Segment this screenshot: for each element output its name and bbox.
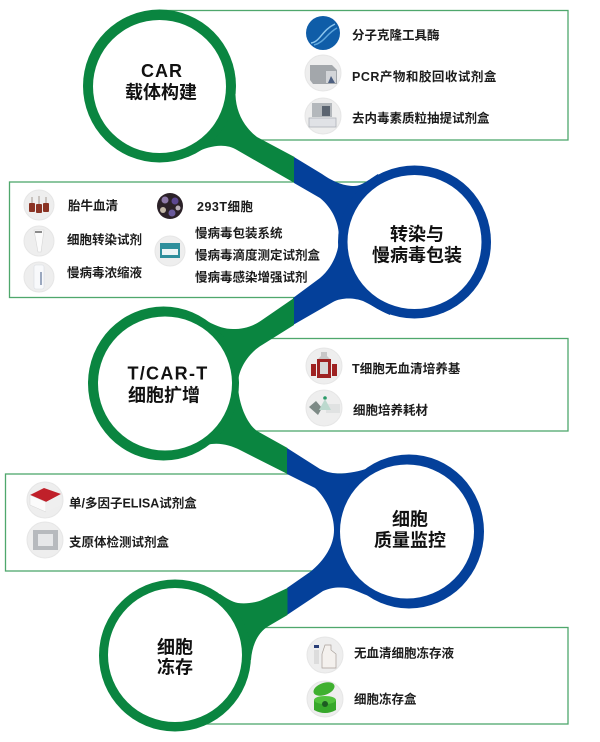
- text: cloning enzymes: 分子克隆工具酶: [352, 28, 440, 42]
- heading: cell cryopreservation: [157, 638, 193, 678]
- heading: transfection and lentivirus packaging: 慢病毒包装: [372, 244, 462, 266]
- text: cell culture consumables: 细胞培养耗材: [353, 402, 429, 418]
- text: transfection reagent: 细胞转染试剂: [67, 232, 142, 247]
- heading: cell cryopreservation: 冻存: [157, 656, 193, 678]
- heading: T/CAR-T cell expansion: 细胞扩增: [128, 386, 200, 406]
- text: freezing medium: 无血清细胞冻存液: [354, 646, 455, 660]
- text: lentivirus packaging and titer items: 慢病毒感染增强试剂: [195, 270, 308, 284]
- node: CAR vector construction: [83, 10, 294, 183]
- text: endotoxin-free plasmid kit: 去内毒素质粒抽提试剂盒: [352, 110, 490, 126]
- icon: freezing medium: [307, 637, 343, 673]
- text: ELISA kit: 单/多因子ELISA试剂盒: [69, 496, 197, 510]
- icon: plasmid extraction kit: [305, 98, 341, 134]
- icon: mycoplasma kit: [27, 522, 63, 558]
- panel: quality control products: [6, 474, 406, 571]
- text: PCR purification kit: PCR产物和胶回收试剂盒: [352, 69, 497, 84]
- panel: cryopreservation products: [175, 628, 568, 724]
- heading: cell quality control: [374, 510, 446, 550]
- panel: cell expansion products: [165, 338, 568, 431]
- icon: lentivirus kit: [155, 236, 185, 266]
- panel: transfection products: [10, 182, 410, 298]
- icon: lentivirus concentrate: [24, 262, 54, 292]
- text: lentivirus packaging and titer items: [195, 226, 321, 284]
- icon: transfection reagent: [24, 226, 54, 256]
- icon: freezing box: [307, 680, 343, 717]
- heading: transfection and lentivirus packaging: 转染与: [390, 224, 444, 244]
- icon: DNA: [306, 16, 340, 50]
- heading: CAR vector construction: CAR: [141, 61, 183, 81]
- heading: T/CAR-T cell expansion: T/CAR-T: [127, 364, 209, 384]
- heading: cell quality control: 质量监控: [374, 530, 446, 550]
- text: lentivirus concentrate: 慢病毒浓缩液: [67, 265, 143, 280]
- icon: cell culture consumables: [306, 390, 342, 426]
- heading: cell quality control: 细胞: [392, 510, 428, 530]
- node: cell cryopreservation: [99, 580, 288, 732]
- heading: CAR vector construction: 载体构建: [125, 82, 197, 102]
- text: 293T cells: 293T细胞: [197, 199, 254, 214]
- icon: 293T cells: [157, 193, 183, 219]
- text: mycoplasma kit: 支原体检测试剂盒: [69, 534, 170, 550]
- text: T cell serum-free medium: T细胞无血清培养基: [352, 361, 461, 376]
- heading: CAR vector construction: [125, 61, 197, 102]
- node: T/CAR-T cell expansion: [88, 298, 294, 474]
- heading: cell cryopreservation: 细胞: [157, 638, 193, 658]
- text: fetal bovine serum: 胎牛血清: [68, 198, 118, 213]
- panel: CAR vector products: [160, 10, 568, 140]
- text: lentivirus packaging and titer items: 慢病毒包装系统: [195, 226, 283, 240]
- node: transfection and lentivirus packaging: [293, 157, 491, 325]
- text: lentivirus packaging and titer items: 慢病毒滴度测定试剂盒: [195, 248, 321, 262]
- node: cell quality control: [287, 448, 484, 615]
- heading: T/CAR-T cell expansion: [127, 364, 209, 406]
- icon: ELISA kit: [27, 482, 63, 518]
- icon: PCR purification kit: [305, 55, 341, 91]
- heading: transfection and lentivirus packaging: [372, 224, 462, 266]
- icon: T cell serum-free medium: [306, 348, 342, 384]
- icon: fetal bovine serum: [24, 190, 54, 220]
- text: freezing box: 细胞冻存盒: [354, 692, 417, 706]
